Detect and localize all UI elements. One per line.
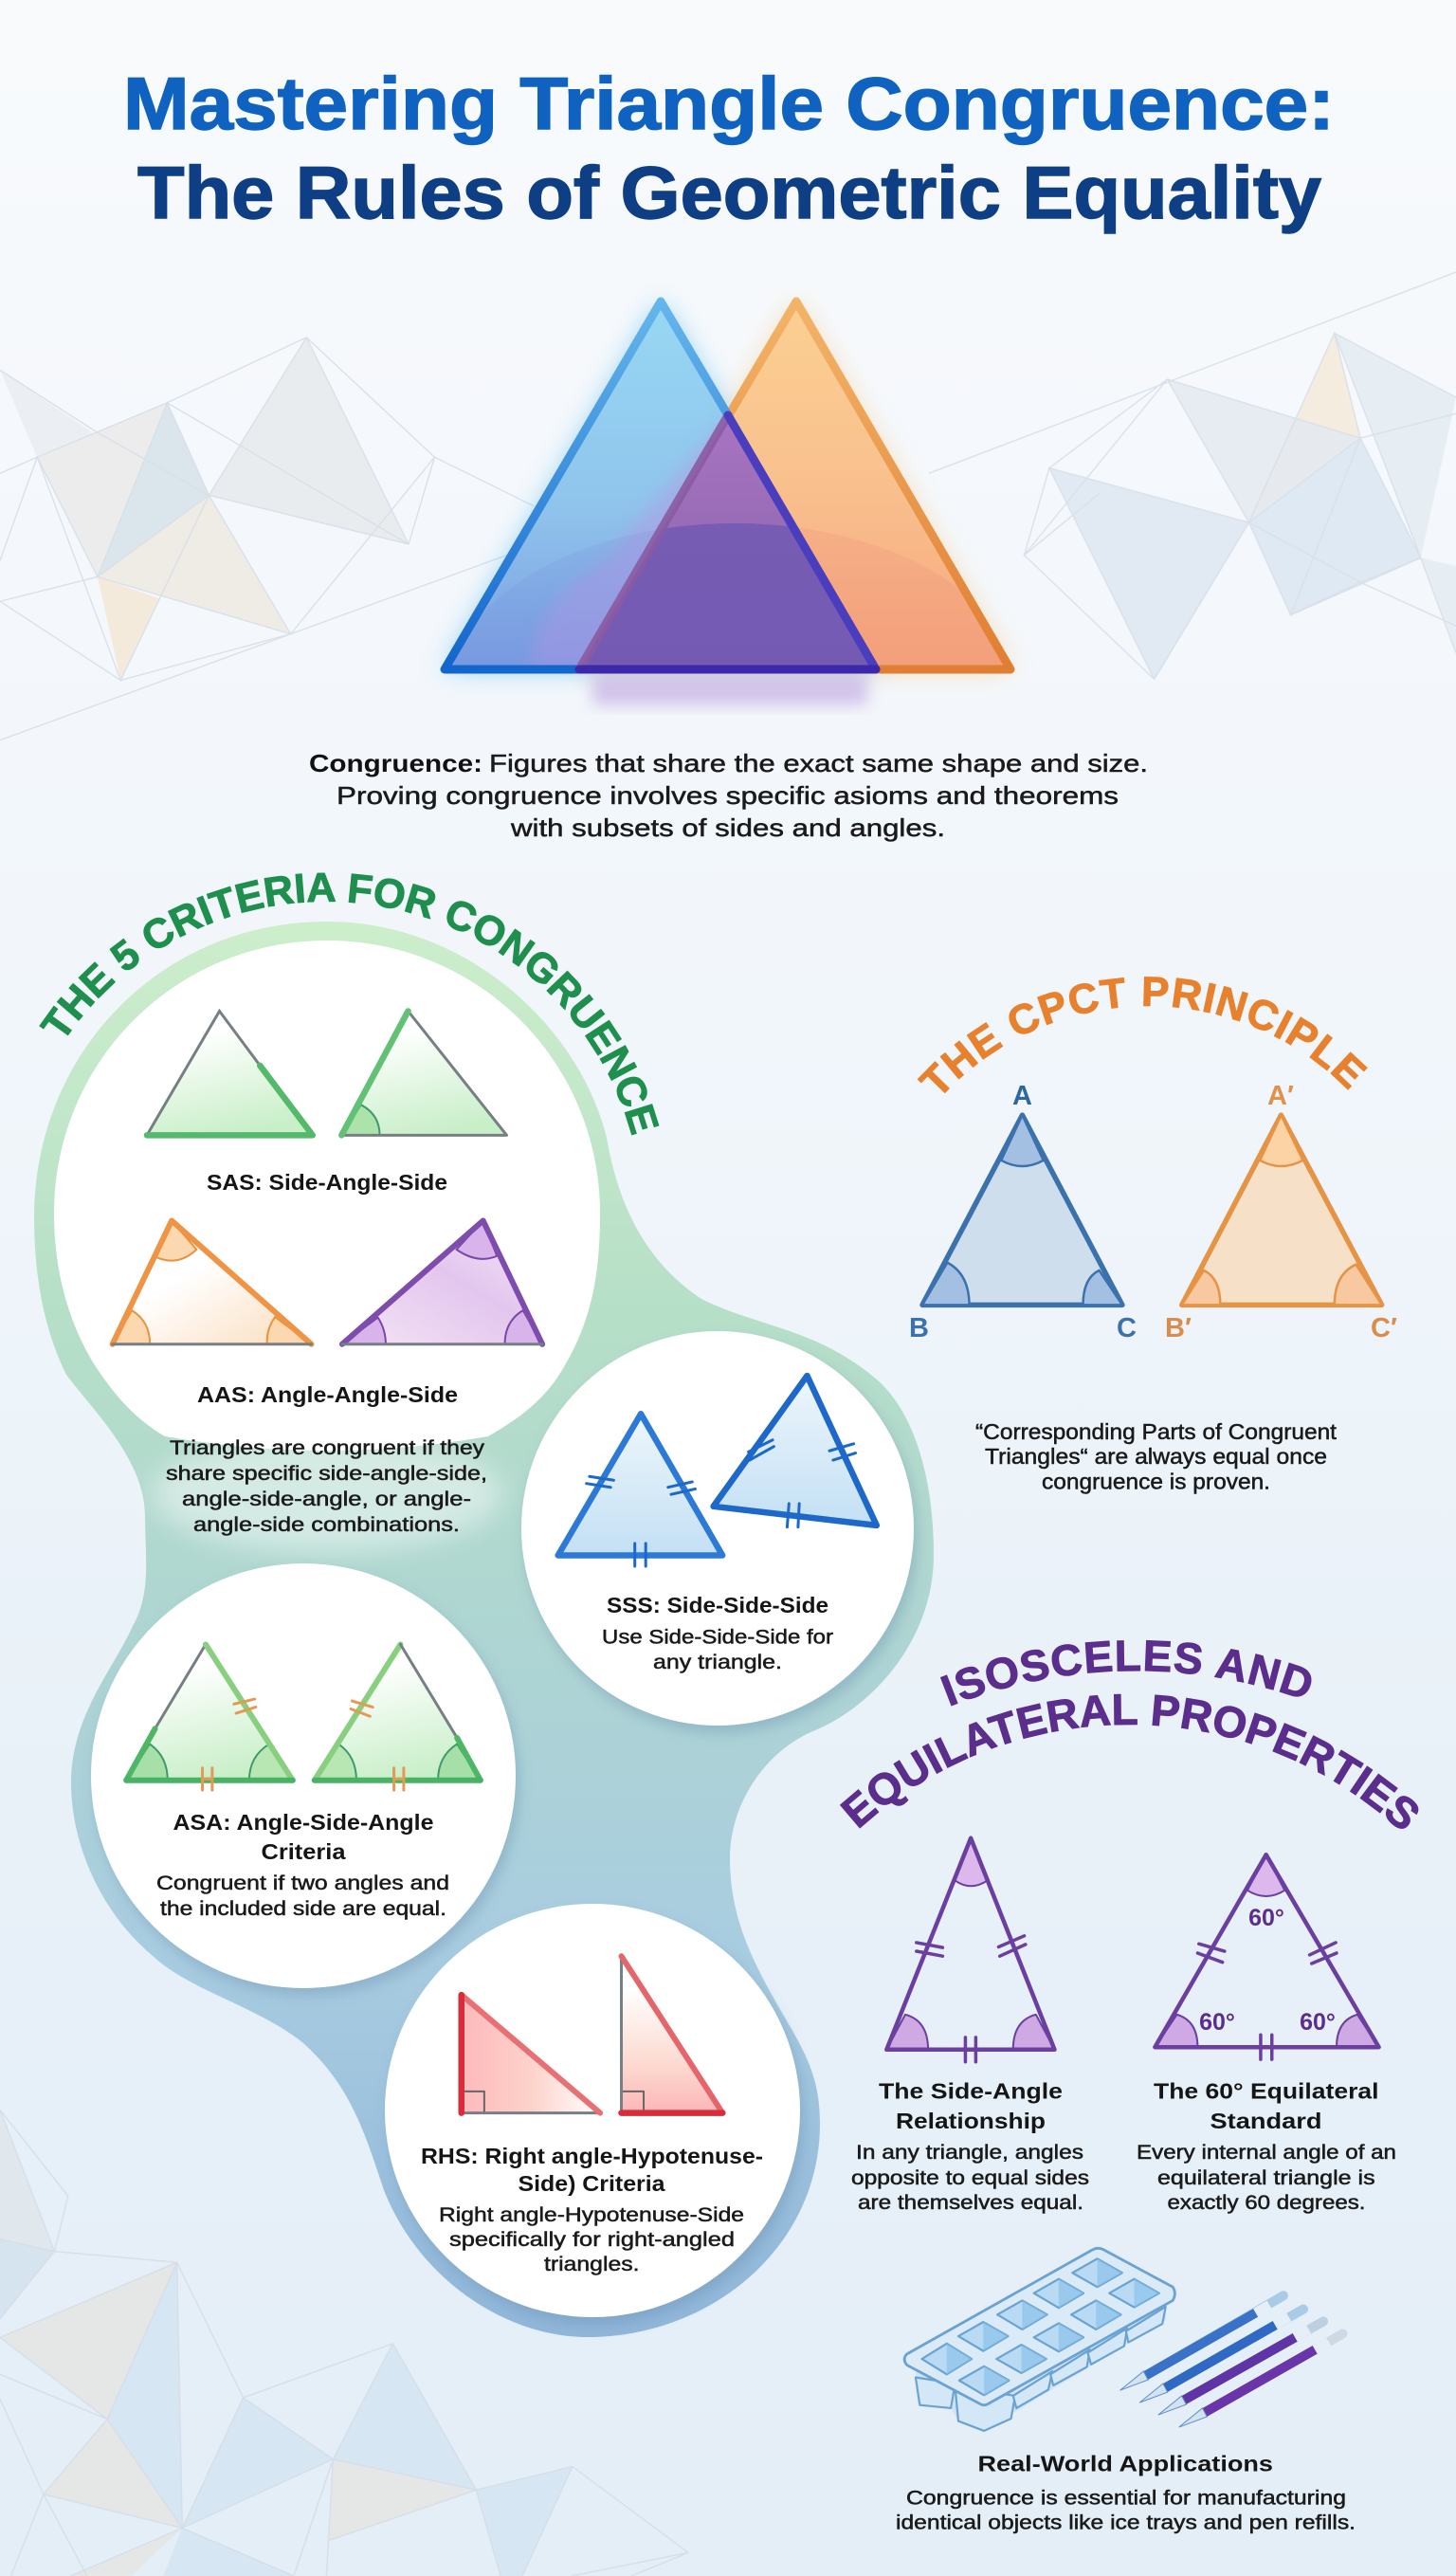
- card: RHS: [385, 1904, 800, 2317]
- description: criteria overview: angle-side-angle, or angle-: [182, 1489, 471, 1510]
- icon: SSS triangles: [558, 1376, 877, 1566]
- description: CPCT: [975, 1419, 1338, 1494]
- label: side-angle relationship: The Side-Angle: [879, 2079, 1063, 2104]
- icon: triangle ABC: [922, 1115, 1122, 1305]
- background low-poly mesh: left: [0, 338, 534, 740]
- description: side-angle relationship: are themselves equal.: [858, 2192, 1083, 2214]
- icon: AAS triangles: [113, 1220, 542, 1344]
- label: 60 degree standard: The 60° Equilateral: [1154, 2079, 1378, 2104]
- background low-poly mesh: right: [929, 272, 1456, 679]
- hero: overlapping triangles: [445, 301, 1019, 861]
- icon: equilateral triangle: [1155, 1854, 1379, 2059]
- label: RHS: [421, 2144, 763, 2196]
- vertex labels: B′: [1165, 1313, 1192, 1343]
- panel: equilateral triangle: [1137, 1854, 1396, 2214]
- description: CPCT: Triangles“ are always equal once: [985, 1444, 1327, 1469]
- label: RHS: Side) Criteria: [518, 2171, 665, 2196]
- label: ASA: [173, 1810, 434, 1864]
- label: ASA: ASA: Angle-Side-Angle: [173, 1810, 434, 1835]
- description: SSS: any triangle.: [653, 1652, 782, 1673]
- description: ASA: [156, 1873, 449, 1920]
- description: CPCT: congruence is proven.: [1042, 1470, 1270, 1494]
- vertex labels: B: [909, 1313, 929, 1343]
- description: 60 degree standard: exactly 60 degrees.: [1168, 2192, 1365, 2214]
- label: ASA: Criteria: [262, 1839, 346, 1864]
- description: real-world applications: identical objects like ice trays and pen refills.: [896, 2512, 1356, 2534]
- heading: isosceles and equilateral properties: EQUILATERAL PROPERTIES: [840, 1693, 1418, 1829]
- label: SSS: SSS: Side-Side-Side: [607, 1593, 828, 1617]
- title: The Rules of Geometric Equality: [137, 151, 1321, 234]
- intro text: with subsets of sides and angles.: [510, 813, 945, 842]
- card: SAS and AAS: [54, 941, 600, 1552]
- description: 60 degree standard: equilateral triangle is: [1157, 2167, 1375, 2189]
- description: side-angle relationship: opposite to equal sides: [851, 2167, 1089, 2189]
- description: side-angle relationship: In any triangle, angles: [856, 2142, 1083, 2164]
- panel: criteria blob: [34, 922, 934, 2337]
- angle labels: 60°: [1300, 2009, 1336, 2036]
- icon: SAS triangles: [147, 1011, 506, 1135]
- vertex labels: [909, 1081, 1397, 1343]
- icon: ice tray: [904, 2248, 1174, 2431]
- intro text: Congruence:: [309, 749, 482, 777]
- angle labels: 60°: [1199, 2009, 1235, 2036]
- title: Mastering Triangle Congruence:: [123, 62, 1335, 145]
- description: RHS: specifically for right-angled: [449, 2229, 735, 2251]
- angle labels: 60°: [1248, 1905, 1284, 1931]
- label: 60 degree standard: [1154, 2079, 1378, 2133]
- title: [123, 62, 1335, 234]
- description: side-angle relationship: [851, 2142, 1089, 2214]
- description: criteria overview: share specific side-angle-side,: [166, 1463, 487, 1485]
- icon: pen refills: [1120, 2295, 1343, 2427]
- description: criteria overview: [166, 1437, 487, 1536]
- icon: triangle A'B'C': [1182, 1115, 1382, 1305]
- panel: isosceles triangle: [851, 1838, 1089, 2214]
- description: criteria overview: angle-side combinations.: [193, 1514, 460, 1536]
- intro text: Figures that share the exact same shape and size.: [489, 749, 1148, 777]
- description: ASA: the included side are equal.: [160, 1898, 446, 1920]
- description: RHS: triangles.: [544, 2254, 639, 2275]
- icon: isosceles triangle: [886, 1838, 1054, 2062]
- description: SSS: [602, 1627, 833, 1673]
- label: AAS: AAS: Angle-Angle-Side: [197, 1382, 458, 1407]
- label: side-angle relationship: [879, 2079, 1063, 2133]
- icon: RHS triangles: [462, 1956, 722, 2113]
- intro text: [309, 749, 1148, 842]
- description: SSS: Use Side-Side-Side for: [602, 1627, 833, 1648]
- heading: isosceles and equilateral properties: ISOSCELES AND: [940, 1640, 1312, 1707]
- panel: CPCT diagram: [909, 1081, 1397, 1343]
- description: criteria overview: Triangles are congruent if they: [170, 1437, 485, 1459]
- card: SSS: [521, 1331, 914, 1726]
- description: ASA: Congruent if two angles and: [156, 1873, 449, 1894]
- label: 60 degree standard: Standard: [1210, 2109, 1321, 2133]
- vertex labels: C: [1117, 1313, 1137, 1343]
- label: RHS: RHS: Right angle-Hypotenuse-: [421, 2144, 763, 2168]
- description: real-world applications: Congruence is essential for manufacturing: [906, 2488, 1346, 2510]
- label: real-world applications: Real-World Applications: [978, 2452, 1273, 2476]
- label: SAS: SAS: Side-Angle-Side: [207, 1170, 447, 1195]
- heading: the CPCT principle: THE CPCT PRINCIPLE: [918, 977, 1368, 1094]
- description: RHS: [439, 2204, 744, 2275]
- background low-poly mesh: bottom left: [0, 2110, 688, 2576]
- icon: ASA triangles: [126, 1644, 481, 1790]
- description: RHS: Right angle-Hypotenuse-Side: [439, 2204, 744, 2226]
- heading: the 5 criteria: THE 5 CRITERIA FOR CONGRUENCE: [39, 872, 660, 1136]
- angle labels: [1199, 1905, 1336, 2036]
- description: 60 degree standard: [1137, 2142, 1396, 2214]
- vertex labels: A: [1012, 1081, 1032, 1111]
- card: ASA: [91, 1563, 516, 1988]
- blob background: [34, 922, 934, 2337]
- intro text: Proving congruence involves specific asioms and theorems: [337, 781, 1119, 810]
- vertex labels: C′: [1371, 1313, 1397, 1343]
- description: CPCT: “Corresponding Parts of Congruent: [975, 1419, 1338, 1444]
- vertex labels: A′: [1267, 1081, 1294, 1111]
- label: side-angle relationship: Relationship: [896, 2109, 1046, 2133]
- description: 60 degree standard: Every internal angle of an: [1137, 2142, 1396, 2164]
- description: real-world applications: [896, 2488, 1356, 2534]
